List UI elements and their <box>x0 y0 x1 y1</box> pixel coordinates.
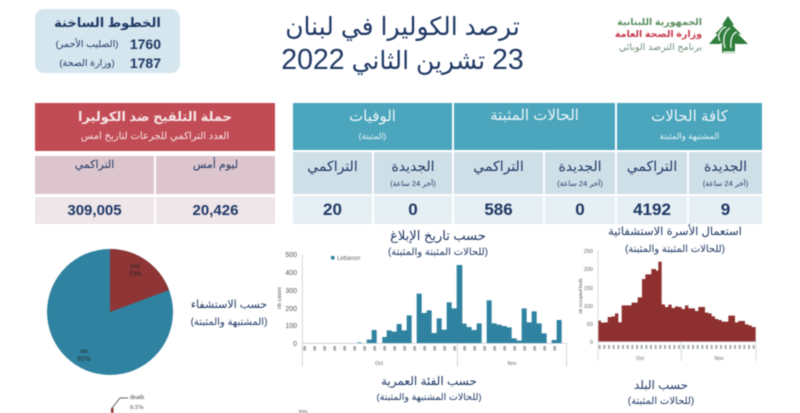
value: all cases cumulative: 4192 <box>633 200 671 219</box>
bar chart: cases by report date: 100 <box>285 323 297 330</box>
logo text: برنامج الترصد الوبائي <box>619 42 702 53</box>
hotline red cross <box>56 36 162 52</box>
area chart: hospital beds: 200 <box>584 267 593 273</box>
cumulative value: 309,005 <box>67 202 122 219</box>
bar chart: cases by report date: Lebanon <box>337 256 360 262</box>
value: deaths new <box>374 196 452 224</box>
heading: by hospitalisation: حسب الاستشفاء <box>191 299 267 311</box>
value: all cases cumulative <box>617 196 687 224</box>
value: all cases new <box>689 196 762 224</box>
hotline ministry of health <box>59 55 162 71</box>
hotline ministry of health: 1787 <box>130 55 161 71</box>
deaths new label: (آخر 24 ساعة) <box>390 179 436 188</box>
value: all cases new: 9 <box>721 200 730 219</box>
ministry logo <box>614 16 748 54</box>
value: confirmed cumulative: 586 <box>484 200 513 219</box>
confirmed new label: (آخر 24 ساعة) <box>557 179 603 188</box>
header: deaths <box>293 103 452 150</box>
logo text: الجمهورية اللبنانية <box>617 17 702 28</box>
heading: by report date <box>388 228 488 258</box>
header: all cases: كافة الحالات <box>651 108 728 125</box>
header: confirmed <box>454 103 615 150</box>
header: confirmed: الحالات المثبتة <box>490 107 579 124</box>
heading: by country: (للحالات المثبتة) <box>628 396 694 407</box>
heading: by hospitalisation <box>190 298 268 328</box>
bar chart: cases by report date: 200 <box>285 306 297 313</box>
area chart: hospital beds: 150 <box>584 286 593 292</box>
heading: by country <box>628 378 694 407</box>
logo text: وزارة الصحة العامة <box>615 29 702 40</box>
confirmed cumulative label <box>454 152 543 194</box>
heading: hospital bed use <box>608 223 742 256</box>
hotline red cross: (الصليب الأحمر) <box>56 39 118 50</box>
heading: by age group: (للحالات المشتبهة والمثبتة) <box>376 392 482 403</box>
area chart: hospital beds: 250 <box>584 249 593 255</box>
bar chart: cases by report date: 300 <box>285 288 297 295</box>
bar chart: cases by report date: nb cases <box>277 287 283 309</box>
yesterday label: ليوم أمس <box>193 159 238 171</box>
deaths cumulative label <box>293 152 372 194</box>
panel: case table <box>292 102 763 224</box>
cumulative label <box>35 156 154 194</box>
header: all cases: المشتبهة والمثبتة <box>660 131 719 141</box>
value: deaths cumulative <box>293 196 372 224</box>
heading: by report date: (للحالات المثبتة والمثبتة) <box>388 247 488 258</box>
yesterday value <box>156 197 275 224</box>
vaccination header: العدد التراكمي للجرعات لتاريخ امس <box>81 131 229 142</box>
logo text <box>614 17 702 53</box>
bar chart: cases by report date <box>277 252 567 367</box>
title: ترصد الكوليرا في لبنان <box>285 13 520 41</box>
panel: vaccination campaign <box>34 102 276 224</box>
value: confirmed cumulative <box>454 196 543 224</box>
bar chart: cases by report date: 500 <box>285 252 297 259</box>
confirmed new label <box>545 152 615 194</box>
area chart: hospital beds: 50 <box>587 322 593 328</box>
confirmed new label: الجديدة <box>558 158 602 174</box>
hotlines panel <box>35 9 180 73</box>
heading: by age group <box>376 374 482 404</box>
all cases cumulative label: التراكمي <box>627 158 677 174</box>
bar chart: cases by report date: 0 <box>293 341 297 348</box>
age chart fragment: death callout: 0.5% <box>130 404 144 411</box>
age chart fragment: death callout <box>111 394 145 413</box>
heading: by country: حسب البلد <box>634 378 688 392</box>
value: deaths new: 0 <box>408 200 418 219</box>
deaths new label <box>374 152 452 194</box>
confirmed cumulative label: التراكمي <box>473 158 524 174</box>
hotline red cross: 1760 <box>130 36 161 52</box>
area chart: hospital beds: Nov <box>715 356 724 362</box>
vaccination header: حملة التلقيح ضد الكوليرا <box>78 109 232 124</box>
heading: by age group: حسب الفئة العمرية <box>381 374 477 388</box>
area chart: hospital beds: Oct <box>636 356 644 362</box>
icon: cedar <box>708 16 748 54</box>
pie chart: hospitalisation <box>47 249 173 375</box>
all cases new label: (آخر 24 ساعة) <box>703 179 748 188</box>
area chart: hospital beds: 100 <box>584 304 593 310</box>
heading: hospital bed use: (للحالات المثبتة والمثبتة) <box>625 244 725 255</box>
header: deaths: الوفيات <box>349 108 396 125</box>
value: confirmed new <box>545 196 615 224</box>
all cases new label <box>689 152 762 194</box>
pie chart: hospitalisation: 81% <box>78 355 91 363</box>
deaths cumulative label: التراكمي <box>307 158 358 174</box>
yesterday value: 20,426 <box>193 202 238 219</box>
all cases cumulative label <box>617 152 687 194</box>
yesterday label <box>156 156 275 194</box>
hotlines heading: الخطوط الساخنة <box>54 15 161 30</box>
area chart: hospital beds <box>578 249 756 362</box>
age chart fragment: death callout: death <box>130 394 145 401</box>
deaths new label: الجديدة <box>391 158 435 174</box>
hotline ministry of health: (وزارة الصحة) <box>59 58 115 69</box>
area chart: hospital beds: nb occupied beds <box>578 278 583 314</box>
pie chart: hospitalisation: 19% <box>129 270 142 278</box>
all cases new label: الجديدة <box>704 158 747 174</box>
heading: by report date: حسب تاريخ الإبلاغ <box>390 228 486 243</box>
cumulative label: التراكمي <box>75 159 114 171</box>
pie chart: hospitalisation: no <box>80 347 88 355</box>
bar chart: cases by report date: 400 <box>285 270 297 277</box>
header: all cases <box>617 103 762 150</box>
area chart: hospital beds: 0 <box>590 340 593 346</box>
bar chart: cases by report date: Nov <box>508 361 517 367</box>
title: 23 تشرين الثاني 2022 <box>281 44 524 76</box>
value: deaths cumulative: 20 <box>323 200 342 219</box>
heading: hospital bed use: استعمال الأسرة الاستشفائية <box>608 226 742 238</box>
bar chart: cases by report date: Oct <box>375 361 383 367</box>
pie chart: hospitalisation: yes <box>130 262 140 270</box>
vaccination header <box>35 103 275 151</box>
cumulative value <box>35 197 154 224</box>
title <box>281 13 524 76</box>
value: confirmed new: 0 <box>575 200 585 219</box>
heading: by hospitalisation: (المشتبهة والمثبتة) <box>191 317 267 328</box>
header: deaths: (المثبتة) <box>359 131 386 141</box>
